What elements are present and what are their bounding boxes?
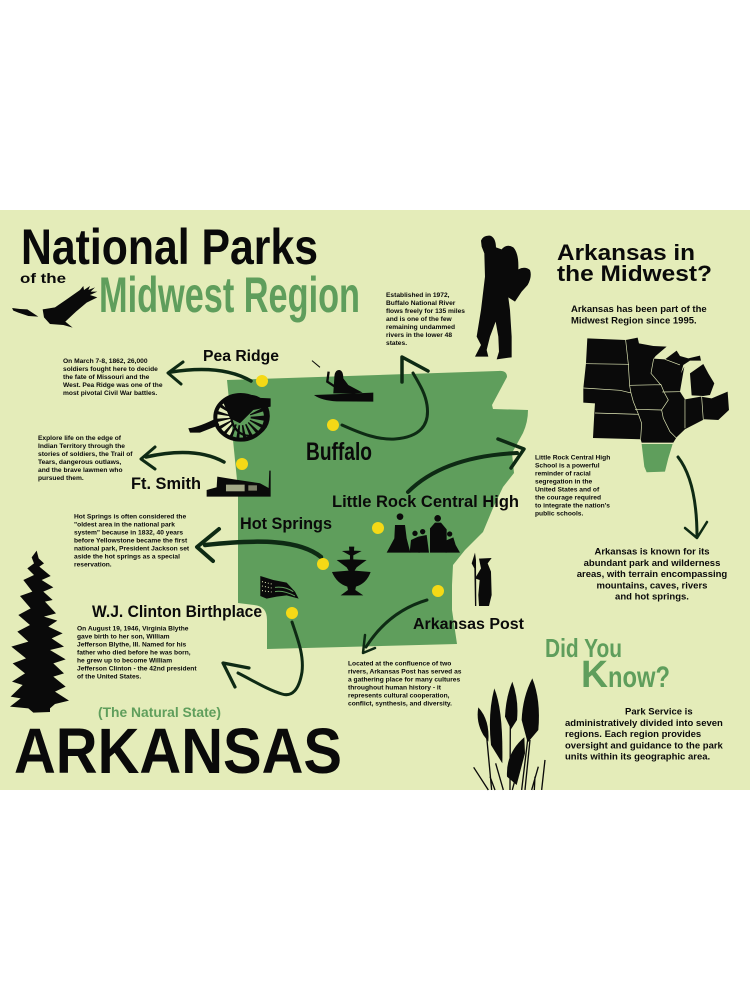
label: Hot Springs: Hot Springs — [240, 514, 332, 533]
arrow: Hot Springs — [197, 529, 321, 561]
text: Did You Know body: administratively divided into seven — [565, 718, 723, 729]
text: Pea Ridge description: most pivotal Civil War battles. — [63, 390, 157, 397]
text: Buffalo description: flows freely for 135 miles — [386, 308, 465, 315]
text: Clinton description: he grew up to become William — [77, 658, 172, 665]
text: Little Rock description: public schools. — [535, 510, 583, 518]
label: Ft. Smith: Ft. Smith — [131, 474, 201, 493]
heading: Did You Know?: Did You — [545, 633, 622, 663]
label: Pea Ridge: Pea Ridge — [203, 348, 279, 365]
text: Hot Springs description: national park, President Jackson set — [74, 546, 190, 553]
text: Arkansas is known for: mountains, caves, rivers — [597, 580, 707, 591]
title: National Parks: National Parks — [21, 219, 318, 275]
text: Little Rock description: Little Rock Central High — [535, 454, 610, 462]
heading: Did You Know?: K — [581, 654, 609, 696]
text: Arkansas part of Midwest Region: Midwest Region since 1995. — [571, 316, 697, 326]
icon: American flag — [260, 576, 299, 599]
label: Buffalo: Buffalo — [306, 438, 372, 466]
text: Hot Springs description: aside the hot springs as a special — [74, 554, 180, 561]
text: Hot Springs description: "oldest area in the national park — [74, 522, 175, 529]
map marker: Arkansas Post — [432, 585, 444, 597]
title: of the: of the — [20, 270, 66, 286]
text: Clinton description: of the United States. — [77, 674, 141, 681]
text: Did You Know body: Park Service is — [625, 706, 693, 718]
icon: pampas grass — [474, 678, 545, 790]
text: Arkansas is known for: Arkansas is known for its — [594, 546, 710, 558]
heading: Arkansas in the Midwest? — [557, 240, 712, 286]
text: Clinton description: father who died before he was born, — [77, 650, 191, 657]
text: Clinton description: On August 19, 1946, Virginia Blythe — [77, 626, 189, 633]
text: Arkansas Post description: represents cultural cooperation, — [348, 692, 450, 700]
icon: hiker — [475, 236, 531, 359]
map marker: Clinton Birthplace — [286, 607, 298, 619]
text: Buffalo description: remaining undammed — [386, 324, 455, 331]
icon: kayaker — [312, 361, 373, 402]
text: Buffalo description: states. — [386, 340, 407, 347]
text: Little Rock description: segregation in the — [535, 478, 592, 486]
text: Clinton description: Jefferson Clinton - the 42nd president — [77, 666, 197, 673]
heading: Arkansas in the Midwest?: Arkansas in — [557, 240, 695, 265]
title: ARKANSAS: ARKANSAS — [14, 715, 342, 787]
text: Hot Springs description: before Yellowstone became the first — [74, 538, 188, 545]
arrow: Midwest map to description — [678, 457, 707, 538]
text: Hot Springs description: Hot Springs is often considered the — [74, 514, 186, 521]
label: The Natural State: (The Natural State) — [98, 705, 221, 720]
text: Did You Know body: units within its geographic area. — [565, 752, 710, 763]
icon: eagle — [9, 286, 97, 328]
text: Arkansas Post description: rivers, Arkansas Post has served as — [348, 668, 462, 676]
map: Arkansas highlighted — [642, 444, 673, 472]
text: Ft. Smith description: Indian Territory through the — [38, 443, 125, 450]
heading: Did You Know?: now? — [608, 661, 670, 694]
map: Arkansas state shape — [227, 371, 528, 649]
label: W.J. Clinton Birthplace: W.J. Clinton Birthplace — [92, 602, 262, 621]
icon: soldier with halberd — [472, 553, 492, 606]
text: Arkansas Post description: Located at the confluence of two — [348, 660, 451, 668]
heading: Arkansas in the Midwest?: the Midwest? — [557, 261, 712, 286]
text: Little Rock description: School is a powerful — [535, 462, 600, 470]
text: Ft. Smith description: Explore life on the edge of — [38, 435, 122, 442]
map marker: Ft. Smith — [236, 458, 248, 470]
map marker: Hot Springs — [317, 558, 329, 570]
text: Clinton description: gave birth to her son, William — [77, 634, 170, 641]
text: Hot Springs description: reservation. — [74, 562, 112, 569]
heading: Did You Know? — [545, 633, 670, 696]
map marker: Little Rock — [372, 522, 384, 534]
text: Did You Know body: regions. Each region provides — [565, 729, 701, 740]
arrow: Clinton — [223, 622, 302, 695]
text: Arkansas is known for: areas, with terrain encompassing — [577, 569, 727, 580]
text: Pea Ridge description: West. Pea Ridge was one of the — [63, 382, 163, 389]
text: Arkansas is known for: and hot springs. — [615, 592, 689, 603]
arrow: Little Rock — [408, 439, 524, 492]
arrow: Pea Ridge — [168, 362, 251, 384]
text: Arkansas Post description: throughout human history - it — [348, 684, 442, 692]
text: Ft. Smith description: and the brave lawmen who — [38, 467, 123, 474]
text: Clinton description: Jefferson Blythe, III. Named for his — [77, 642, 187, 649]
text: Buffalo description: and is one of the few — [386, 316, 453, 323]
icon: pine tree — [10, 551, 69, 713]
map: Midwest states — [583, 338, 729, 472]
text: Arkansas is known for: abundant park and wilderness — [584, 558, 720, 569]
title: Midwest Region: Midwest Region — [99, 267, 360, 323]
text: Little Rock description: the courage required — [535, 494, 601, 502]
text: Little Rock description: to integrate the nation's — [535, 502, 610, 510]
poster background panel — [0, 210, 750, 790]
text: Hot Springs description: system" because in 1832, 40 years — [74, 530, 183, 537]
text: Pea Ridge description: On March 7-8, 1862, 26,000 — [63, 358, 148, 365]
label: Arkansas Post: Arkansas Post — [413, 616, 525, 633]
text: Arkansas part of Midwest Region: Arkansas has been part of the — [571, 304, 707, 315]
arrow: Arkansas Post — [363, 600, 427, 653]
text: Buffalo description: Buffalo National River — [386, 300, 456, 307]
text: Arkansas Post description: a gathering place for many cultures — [348, 676, 460, 684]
text: Ft. Smith description: pursued them. — [38, 475, 84, 482]
label: Little Rock Central High: Little Rock Central High — [332, 492, 519, 511]
text: Ft. Smith description: Tears, dangerous outlaws, — [38, 459, 121, 466]
arrow: Ft. Smith — [141, 447, 224, 469]
text: Buffalo description: rivers in the lower 48 — [386, 332, 452, 339]
icon: Ft. Smith building — [207, 471, 271, 497]
text: Buffalo description: Established in 1972, — [386, 292, 450, 299]
text: Ft. Smith description: stories of soldiers, the Trail of — [38, 451, 133, 458]
text: Pea Ridge description: the fate of Missouri and the — [63, 374, 150, 381]
text: Little Rock description: reminder of racial — [535, 470, 591, 478]
map marker: Pea Ridge — [256, 375, 268, 387]
icon: cannon — [188, 395, 271, 440]
text: Little Rock description: United States and of — [535, 486, 600, 494]
text: Did You Know body: oversight and guidance to the park — [565, 740, 724, 751]
arrow: Buffalo — [342, 357, 428, 439]
icon: family group — [387, 513, 460, 553]
text: Arkansas Post description: conflict, synthesis, and diversity. — [348, 700, 452, 708]
icon: fountain — [332, 547, 371, 595]
map marker: Buffalo — [327, 419, 339, 431]
text: Pea Ridge description: soldiers fought here to decide — [63, 366, 158, 373]
